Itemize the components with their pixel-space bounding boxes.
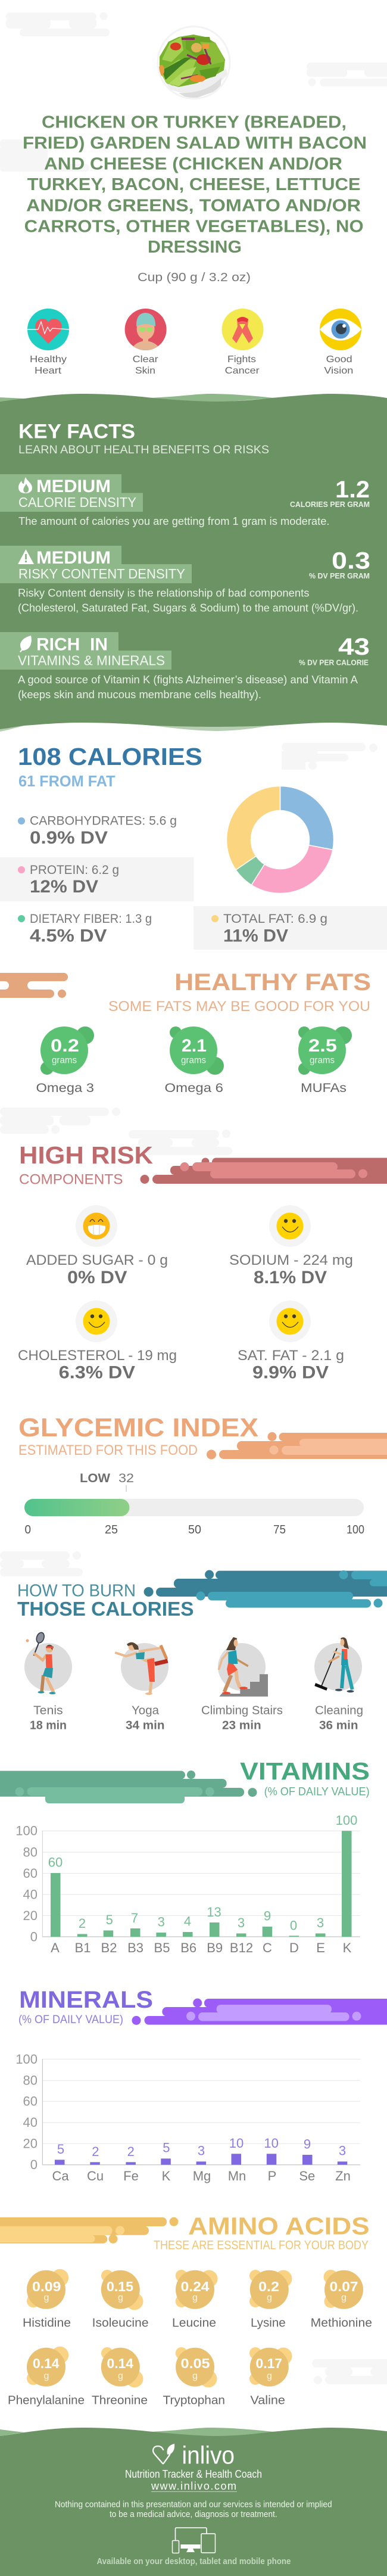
decoration: minerals banner xyxy=(132,1998,387,2025)
activity: climbing stairs: 23 min xyxy=(222,1719,261,1732)
bar chart: vitamins: A xyxy=(51,1940,60,1955)
bar chart: minerals: 80 xyxy=(23,2073,38,2087)
disclaimer xyxy=(55,2500,332,2519)
chart: glycemic index gauge: 32 xyxy=(118,1471,134,1485)
macro: dietary fiber: 4.5% DV xyxy=(30,926,107,946)
bar chart: vitamins: 9 xyxy=(264,1909,271,1924)
heading: vitamins: (% OF DAILY VALUE) xyxy=(264,1786,370,1799)
amino: isoleucine: Isoleucine xyxy=(92,2317,149,2330)
activity: yoga: Yoga xyxy=(132,1704,160,1718)
bar chart: vitamins: 0 xyxy=(30,1929,38,1945)
stat: omega 6: grams xyxy=(181,1056,206,1065)
footer link: www.inlivo.com xyxy=(151,2480,236,2492)
component: saturated fat: 9.9% DV xyxy=(252,1363,329,1383)
component: saturated fat: SAT. FAT - 2.1 g xyxy=(238,1348,344,1364)
benefit: fights cancer: Cancer xyxy=(225,366,260,376)
amino: histidine: g xyxy=(44,2293,49,2303)
bar chart: vitamins: 7 xyxy=(131,1911,138,1925)
stat: MUFAs: 2.5 xyxy=(308,1036,337,1056)
macro: dietary fiber xyxy=(18,912,152,946)
bar chart: vitamins: 0 xyxy=(290,1918,297,1933)
bar chart: vitamins: B1 xyxy=(75,1940,90,1955)
decoration: vitamins banner xyxy=(0,1771,257,1803)
bar chart: vitamins: B6 xyxy=(180,1940,196,1955)
title: TURKEY, BACON, CHEESE, LETTUCE xyxy=(27,175,361,194)
fact: rich in vitamins and minerals: RICH IN xyxy=(36,635,108,655)
amino: phenylalanine: 0.14 xyxy=(33,2356,60,2371)
bar chart: vitamins: B9 xyxy=(207,1940,223,1955)
bar chart: vitamins: B3 xyxy=(127,1940,143,1955)
heading: healthy fats xyxy=(108,969,371,1015)
heading: high risk components: HIGH RISK xyxy=(19,1141,153,1169)
bar chart: vitamins: B5 xyxy=(154,1940,170,1955)
benefit: healthy heart xyxy=(27,309,69,376)
bar chart: vitamins: B12 xyxy=(230,1940,253,1955)
chart: glycemic index gauge: 75 xyxy=(273,1523,286,1536)
chart: glycemic index gauge xyxy=(24,1471,364,1536)
disclaimer: to be a medical advice, diagnosis or treatment. xyxy=(110,2510,277,2519)
bar chart: vitamins: 20 xyxy=(23,1908,38,1923)
fact: rich in vitamins and minerals: VITAMINS & MINERALS xyxy=(18,653,165,668)
decoration: healthy fats banner xyxy=(0,973,68,998)
component: cholesterol: 6.3% DV xyxy=(59,1363,135,1383)
donut chart: macronutrients xyxy=(227,786,334,893)
heading: minerals: MINERALS xyxy=(19,1987,153,2013)
chart: glycemic index gauge: 0 xyxy=(25,1523,31,1536)
amino: leucine: Leucine xyxy=(172,2317,216,2330)
decoration: burn banner xyxy=(144,1570,387,1608)
activity: yoga xyxy=(115,1642,168,1732)
fact: risky content density xyxy=(0,546,370,614)
bar chart: vitamins: B2 xyxy=(101,1940,117,1955)
bar chart: minerals: 2 xyxy=(92,2144,99,2159)
title: AND CHEESE (CHICKEN AND/OR xyxy=(44,155,342,174)
bar chart: vitamins: 4 xyxy=(184,1914,191,1929)
amino: isoleucine xyxy=(92,2270,149,2330)
amino: histidine: Histidine xyxy=(23,2317,71,2330)
amino: methionine: Methionine xyxy=(311,2317,372,2330)
heading: minerals xyxy=(18,1987,153,2026)
bar chart: vitamins: E xyxy=(316,1940,325,1955)
fact: rich in vitamins and minerals: 43 xyxy=(338,634,370,660)
activity: tennis: 18 min xyxy=(30,1719,67,1732)
panel: key facts xyxy=(0,394,387,732)
bar chart: vitamins: 60 xyxy=(23,1866,38,1881)
bar chart: vitamins: 3 xyxy=(317,1915,324,1930)
activity: cleaning xyxy=(314,1637,363,1732)
heading: high risk components xyxy=(19,1141,153,1188)
heading: healthy fats: HEALTHY FATS xyxy=(174,969,371,995)
availability note: Available on your desktop, tablet and mobile phone xyxy=(96,2556,291,2566)
macro: carbohydrates: 0.9% DV xyxy=(30,828,108,848)
heading: amino acids xyxy=(154,2213,370,2253)
amino: leucine xyxy=(172,2270,218,2330)
macro: protein xyxy=(0,857,194,901)
bar chart: vitamins: C xyxy=(263,1940,272,1955)
component: cholesterol xyxy=(18,1301,177,1383)
bar chart: vitamins xyxy=(15,1813,360,1955)
bar chart: vitamins: 3 xyxy=(238,1915,245,1930)
amino: threonine xyxy=(92,2347,148,2407)
title: AND/OR GREENS, TOMATO AND/OR xyxy=(26,197,361,216)
bar chart: vitamins: K xyxy=(343,1940,352,1955)
bar chart: vitamins: 60 xyxy=(48,1855,63,1870)
bar chart: minerals: Ca xyxy=(52,2169,69,2183)
bar chart: minerals: K xyxy=(162,2169,171,2183)
fact: calorie density: 1.2 xyxy=(335,477,370,503)
chart: glycemic index gauge: LOW xyxy=(80,1471,110,1485)
heading: key facts: LEARN ABOUT HEALTH BENEFITS OR RISKS xyxy=(18,444,269,456)
fact: risky content density: % DV PER GRAM xyxy=(309,571,370,580)
macro: total fat: TOTAL FAT: 6.9 g xyxy=(223,912,327,926)
macro: dietary fiber: DIETARY FIBER: 1.3 g xyxy=(30,912,152,926)
chart: glycemic index gauge: 50 xyxy=(188,1523,201,1536)
fact: rich in vitamins and minerals: A good source of Vitamin K (fights Alzheimer’s disease) and Vitamin A xyxy=(18,674,358,686)
icon: devices xyxy=(173,2528,216,2553)
bar chart: minerals: Cu xyxy=(87,2169,104,2183)
stat: MUFAs xyxy=(298,1026,352,1095)
activity: cleaning: Cleaning xyxy=(315,1704,363,1718)
bar chart: minerals: 9 xyxy=(304,2137,311,2152)
bar chart: minerals: 2 xyxy=(127,2144,135,2159)
amino: phenylalanine: Phenylalanine xyxy=(8,2394,85,2407)
heading: healthy fats: SOME FATS MAY BE GOOD FOR YOU xyxy=(108,998,370,1015)
heading: amino acids: AMINO ACIDS xyxy=(188,2213,370,2240)
heading: how to burn those calories: THOSE CALORIES xyxy=(17,1598,194,1620)
component: sodium: 8.1% DV xyxy=(254,1268,327,1287)
decoration: high risk banner xyxy=(141,1158,387,1184)
logo: inlivo xyxy=(153,2441,235,2469)
heading: high risk components: COMPONENTS xyxy=(19,1171,123,1188)
fact: rich in vitamins and minerals: % DV PER CALORIE xyxy=(299,658,369,667)
panel: footer xyxy=(0,2428,387,2576)
component: saturated fat xyxy=(238,1301,344,1383)
fact: rich in vitamins and minerals: (keeps skin and mucous membrane cells healthy). xyxy=(18,689,261,701)
benefit: clear skin: Skin xyxy=(135,366,155,376)
activity: climbing stairs: Climbing Stairs xyxy=(201,1704,283,1718)
benefit: healthy heart: Healthy xyxy=(30,354,67,365)
heading: calories xyxy=(18,743,202,790)
heading: minerals: (% OF DAILY VALUE) xyxy=(18,2014,123,2026)
amino: tryptophan: Tryptophan xyxy=(163,2394,225,2407)
decoration: glycemic banner xyxy=(207,1432,387,1460)
benefit: good vision xyxy=(320,309,361,376)
bar chart: minerals: Mn xyxy=(228,2169,246,2183)
heading: vitamins xyxy=(240,1757,370,1799)
serving size: Cup (90 g / 3.2 oz) xyxy=(138,271,251,284)
footer tagline: Nutrition Tracker & Health Coach xyxy=(125,2468,262,2480)
activity: cleaning: 36 min xyxy=(319,1719,358,1732)
benefit: clear skin xyxy=(125,309,167,376)
fact: risky content density: RISKY CONTENT DENSITY xyxy=(18,566,185,581)
amino: tryptophan: g xyxy=(192,2371,198,2381)
activity: yoga: 34 min xyxy=(126,1719,164,1732)
heading: calories: 108 CALORIES xyxy=(18,743,202,770)
heading: key facts: KEY FACTS xyxy=(18,421,135,443)
activity: climbing stairs xyxy=(201,1637,283,1732)
heading: glycemic index xyxy=(18,1413,258,1458)
amino: valine xyxy=(249,2347,292,2407)
fact: calorie density: CALORIE DENSITY xyxy=(18,494,136,510)
stat: omega 6 xyxy=(164,1026,224,1095)
fact: calorie density: MEDIUM xyxy=(36,477,111,496)
bar chart: vitamins: 40 xyxy=(23,1887,38,1902)
component: added sugar xyxy=(26,1205,168,1287)
bar chart: minerals: P xyxy=(268,2169,276,2183)
amino: tryptophan: 0.05 xyxy=(181,2356,210,2371)
fact: calorie density: The amount of calories you are getting from 1 gram is moderate. xyxy=(18,515,330,527)
amino: isoleucine: g xyxy=(118,2293,123,2303)
bar chart: vitamins: 80 xyxy=(23,1844,38,1860)
amino: methionine: 0.07 xyxy=(330,2279,358,2294)
bar chart: vitamins: 100 xyxy=(15,1824,38,1838)
amino: isoleucine: 0.15 xyxy=(107,2279,133,2294)
bar chart: vitamins: 3 xyxy=(158,1915,165,1930)
bar chart: minerals: 20 xyxy=(23,2136,38,2151)
amino: threonine: g xyxy=(118,2371,123,2381)
fact: risky content density: Risky Content density is the relationship of bad components xyxy=(18,587,310,599)
heading: how to burn those calories xyxy=(17,1581,194,1620)
stat: omega 6: 2.1 xyxy=(182,1036,207,1056)
fact: risky content density: MEDIUM xyxy=(36,548,111,568)
icon: salad plate xyxy=(158,26,230,100)
amino: valine: 0.17 xyxy=(256,2356,282,2371)
amino: phenylalanine: g xyxy=(44,2371,49,2381)
heading: how to burn those calories: HOW TO BURN xyxy=(17,1581,136,1600)
heading: calories: 61 FROM FAT xyxy=(18,772,116,790)
bar chart: minerals: 5 xyxy=(57,2142,64,2157)
bar chart: minerals: 100 xyxy=(15,2052,38,2067)
chart: glycemic index gauge: 100 xyxy=(347,1523,364,1536)
bar chart: minerals: 40 xyxy=(23,2115,38,2130)
bar chart: vitamins: D xyxy=(289,1940,299,1955)
bar chart: minerals: Mg xyxy=(193,2169,211,2183)
bar chart: minerals: 60 xyxy=(23,2093,38,2109)
component: added sugar: ADDED SUGAR - 0 g xyxy=(26,1252,168,1268)
bar chart: minerals: 0 xyxy=(30,2157,38,2172)
amino: leucine: 0.24 xyxy=(181,2279,210,2294)
macro: total fat: 11% DV xyxy=(223,926,288,946)
fact: rich in vitamins and minerals xyxy=(0,632,370,701)
fact: calorie density xyxy=(0,474,370,527)
amino: histidine: 0.09 xyxy=(32,2279,61,2294)
stat: omega 6: Omega 6 xyxy=(164,1081,223,1095)
bar chart: vitamins: 13 xyxy=(207,1905,221,1919)
heading: glycemic index: ESTIMATED FOR THIS FOOD xyxy=(18,1442,198,1458)
bar chart: minerals: Zn xyxy=(335,2169,351,2183)
decoration: amino acids banner xyxy=(0,2217,179,2244)
amino: tryptophan xyxy=(163,2347,225,2407)
macro: total fat xyxy=(194,906,387,950)
amino: lysine xyxy=(249,2270,292,2330)
title: CHICKEN OR TURKEY (BREADED, xyxy=(42,113,347,132)
activity: tennis: Tenis xyxy=(33,1704,63,1718)
bar chart: minerals: Se xyxy=(299,2169,315,2183)
amino: valine: g xyxy=(267,2371,272,2381)
stat: omega 3 xyxy=(36,1026,94,1095)
bar chart: vitamins: 2 xyxy=(79,1916,86,1931)
bar chart: minerals: 10 xyxy=(229,2136,244,2151)
benefit: fights cancer: Fights xyxy=(227,354,256,365)
amino: lysine: 0.2 xyxy=(258,2279,279,2294)
heading: key facts xyxy=(18,421,269,456)
title: DRESSING xyxy=(148,238,242,257)
benefit: good vision: Good xyxy=(326,354,352,365)
component: cholesterol: CHOLESTEROL - 19 mg xyxy=(18,1348,177,1364)
macro: protein: 12% DV xyxy=(30,877,98,897)
disclaimer: Nothing contained in this presentation and our services is intended or implied xyxy=(55,2500,332,2509)
stat: omega 3: Omega 3 xyxy=(36,1081,94,1095)
title xyxy=(23,113,367,257)
fact: calorie density: CALORIES PER GRAM xyxy=(290,500,370,509)
amino: methionine: g xyxy=(341,2293,347,2303)
bar chart: minerals: 5 xyxy=(163,2141,170,2155)
bar chart: vitamins: 100 xyxy=(336,1813,357,1828)
stat: omega 3: grams xyxy=(52,1056,77,1065)
macro: protein: PROTEIN: 6.2 g xyxy=(30,863,119,877)
amino: lysine: Lysine xyxy=(251,2317,286,2330)
title: FRIED) GARDEN SALAD WITH BACON xyxy=(23,133,367,153)
amino: valine: Valine xyxy=(250,2394,285,2407)
chart: glycemic index gauge: 25 xyxy=(105,1523,118,1536)
bar chart: minerals xyxy=(15,2052,360,2183)
heading: vitamins: VITAMINS xyxy=(240,1757,370,1785)
bar chart: minerals: 10 xyxy=(264,2136,279,2151)
bar chart: minerals: 3 xyxy=(339,2143,346,2158)
amino: histidine xyxy=(23,2269,71,2330)
benefit: healthy heart: Heart xyxy=(35,366,62,376)
component: sodium xyxy=(229,1205,353,1287)
amino: methionine xyxy=(311,2270,372,2330)
benefit: fights cancer xyxy=(221,309,263,376)
stat: MUFAs: MUFAs xyxy=(301,1081,347,1095)
amino: phenylalanine xyxy=(8,2347,85,2407)
title: CARROTS, OTHER VEGETABLES), NO xyxy=(24,217,364,236)
fact: risky content density: 0.3 xyxy=(332,548,370,574)
bar chart: minerals: 3 xyxy=(198,2143,205,2158)
bar chart: minerals: Fe xyxy=(123,2169,139,2183)
amino: threonine: Threonine xyxy=(92,2394,148,2407)
amino: leucine: g xyxy=(192,2293,198,2303)
benefit: good vision: Vision xyxy=(324,366,353,376)
benefit: clear skin: Clear xyxy=(133,354,158,365)
stat: omega 3: 0.2 xyxy=(51,1036,79,1056)
macro: carbohydrates: CARBOHYDRATES: 5.6 g xyxy=(30,814,177,828)
logo: inlivo: inlivo xyxy=(182,2441,235,2469)
amino: threonine: 0.14 xyxy=(107,2356,133,2371)
stat: MUFAs: grams xyxy=(310,1056,335,1065)
macro: carbohydrates xyxy=(18,814,177,848)
fact: risky content density: (Cholesterol, Saturated Fat, Sugars & Sodium) to the amount (%DV/gr). xyxy=(18,602,358,614)
component: added sugar: 0% DV xyxy=(67,1268,127,1287)
component: sodium: SODIUM - 224 mg xyxy=(229,1252,353,1268)
bar chart: vitamins: 5 xyxy=(106,1912,113,1927)
activity: tennis xyxy=(24,1631,72,1732)
amino: lysine: g xyxy=(267,2293,272,2303)
heading: glycemic index: GLYCEMIC INDEX xyxy=(18,1413,258,1442)
